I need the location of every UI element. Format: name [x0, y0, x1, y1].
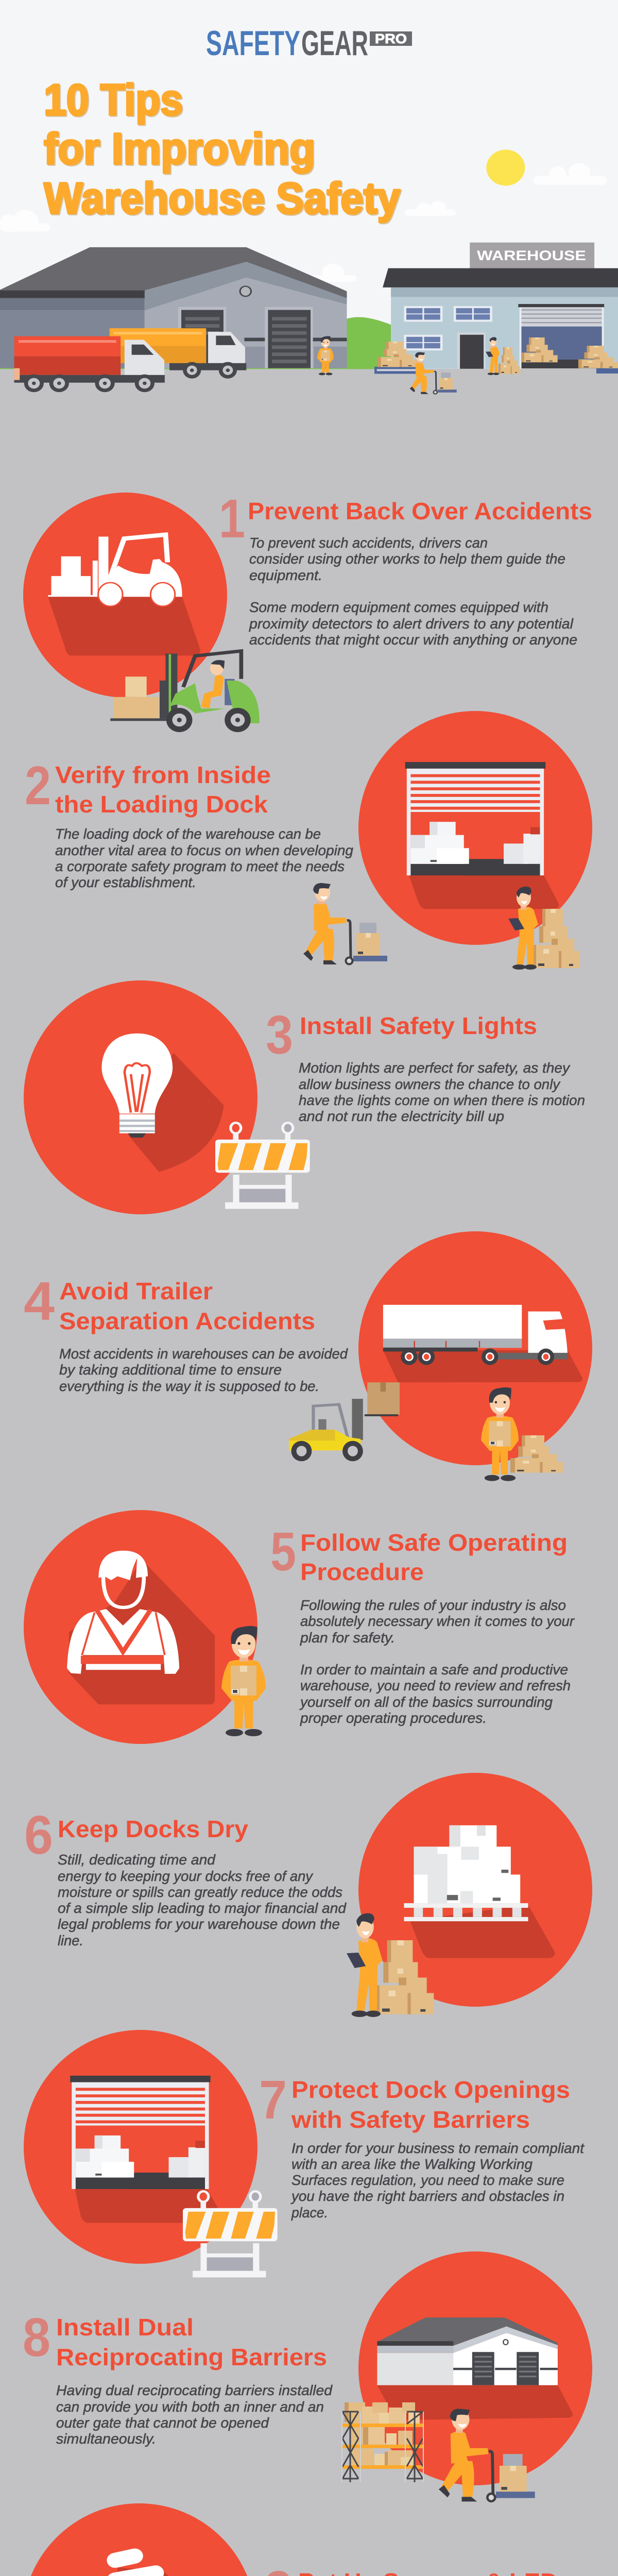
heading: Verify from Inside: [55, 761, 271, 788]
heading: Protect Dock Openings: [291, 2076, 570, 2103]
heading: Keep Docks Dry: [58, 1816, 248, 1842]
icon: worker silhouette: [67, 1551, 215, 1704]
number 6: 6: [24, 1805, 53, 1866]
heading: Separation Accidents: [59, 1308, 315, 1334]
body text: plan for safety.: [300, 1630, 395, 1646]
body text: Surfaces regulation, you need to make sure: [291, 2172, 564, 2188]
body text: Motion lights are perfect for safety, as they: [299, 1060, 571, 1076]
body text: In order for your business to remain compliant: [291, 2140, 585, 2156]
body text: Some modern equipment comes equipped with: [249, 599, 548, 615]
illustration: worker with cart: [439, 2409, 535, 2502]
body text: and not run the electricity bill up: [299, 1108, 504, 1124]
body text: with an area like the Walking Working: [291, 2156, 533, 2172]
illustration: worker with clipboard: [347, 1913, 383, 2017]
body text: of your establishment.: [55, 874, 196, 890]
number 4: 4: [24, 1271, 55, 1332]
body text: Following the rules of your industry is also: [300, 1597, 566, 1613]
number 1: 1: [219, 488, 245, 549]
heading: Reciprocating Barriers: [56, 2344, 327, 2370]
illustration: worker holding box: [221, 1626, 266, 1736]
body text: Having dual reciprocating barriers installed: [56, 2382, 333, 2398]
icon: pallet of boxes: [404, 1825, 555, 1958]
body text: moisture or spills can greatly reduce the odds: [58, 1884, 342, 1900]
body text: To prevent such accidents, drivers can: [249, 535, 488, 551]
body text: of a simple slip leading to major financial and: [58, 1900, 347, 1916]
logo: SafetyGear Pro: GEAR: [301, 24, 368, 63]
body text: proximity detectors to alert drivers to any potential: [249, 616, 574, 632]
body text: you have the right barriers and obstacles in: [290, 2188, 564, 2204]
body text: [58, 1852, 347, 1948]
body text: absolutely necessary when it comes to your: [300, 1613, 575, 1629]
illustration: worker with cart: [303, 883, 387, 964]
circle: [22, 2503, 256, 2576]
heading: [55, 761, 271, 818]
heading: [56, 2314, 327, 2370]
heading: [300, 1529, 568, 1585]
body text: everything is the way it is supposed to be.: [59, 1378, 319, 1394]
logo: SafetyGear Pro: SAFETY: [206, 24, 300, 63]
body text: [249, 535, 577, 648]
title: [44, 76, 400, 223]
circle: [358, 1773, 592, 2007]
left warehouse: [0, 247, 391, 369]
body text: proper operating procedures.: [300, 1710, 487, 1726]
icon: truck: [383, 1305, 582, 1382]
number 8: 8: [23, 2307, 50, 2368]
orange truck: [110, 328, 246, 379]
title: for Improving: [44, 125, 315, 174]
body text: legal problems for your warehouse down the: [58, 1916, 340, 1932]
panel: tip 5: [24, 1510, 575, 1744]
panel: tip 8: [23, 2251, 592, 2502]
body text: can provide you with both an inner and an: [56, 2399, 324, 2415]
panel: tip 6: [24, 1773, 592, 2017]
body text: by taking additional time to ensure: [59, 1362, 282, 1378]
heading: the Loading Dock: [55, 791, 268, 818]
warehouse sign: WAREHOUSE: [477, 248, 586, 263]
body text: allow business owners the chance to only: [299, 1076, 561, 1092]
body text: [290, 2140, 585, 2221]
body text: a corporate safety program to meet the needs: [55, 858, 345, 874]
body text: Still, dedicating time and: [58, 1852, 216, 1868]
body text: have the lights come on when there is motion: [299, 1092, 585, 1108]
illustration: boxes: [532, 909, 580, 968]
illustration: worker with clipboard: [508, 887, 538, 970]
circle: [358, 2251, 592, 2485]
number 7: 7: [259, 2070, 287, 2130]
panel: tip 9: [22, 2503, 558, 2576]
heading: Follow Safe Operating: [300, 1529, 568, 1556]
body text: energy to keeping your docks free of any: [58, 1868, 314, 1884]
circle: [24, 1510, 258, 1744]
body text: [55, 826, 353, 890]
heading: with Safety Barriers: [291, 2106, 530, 2133]
icon: CFL bulb: [111, 2556, 236, 2576]
illustration: boxes: [374, 1940, 434, 2014]
body text: place.: [291, 2205, 328, 2221]
circle: [358, 711, 592, 945]
heading: Avoid Trailer: [59, 1278, 213, 1304]
illustration: barrier: [183, 2191, 278, 2277]
title: 10 Tips: [44, 76, 183, 125]
illustration: warehouses and trucks: [0, 149, 618, 394]
heading: [59, 1278, 315, 1334]
body text: accidents that might occur with anything or anyone: [249, 632, 577, 648]
circle: [24, 980, 258, 1214]
heading: Procedure: [300, 1558, 424, 1585]
panel: tip 7: [24, 2030, 585, 2277]
body text: [299, 1060, 585, 1124]
circle: [23, 493, 227, 698]
illustration: green forklift: [110, 651, 260, 732]
boxes and workers: [317, 336, 618, 394]
body text: equipment.: [249, 567, 322, 583]
number 5: 5: [270, 1521, 296, 1582]
heading: [291, 2076, 570, 2133]
icon: roller door: [70, 2076, 227, 2223]
logo: SafetyGear Pro: [206, 24, 412, 63]
heading: Install Dual: [56, 2314, 194, 2341]
body text: [299, 1597, 575, 1726]
icon: white forklift: [48, 535, 200, 655]
red truck: [14, 336, 165, 392]
icon: roller door: [405, 762, 559, 909]
icon: warehouse: [377, 2317, 573, 2420]
panel: tip 1: [23, 488, 592, 732]
body text: Most accidents in warehouses can be avoided: [59, 1346, 348, 1362]
body text: [59, 1346, 348, 1394]
body text: outer gate that cannot be opened: [56, 2415, 269, 2431]
panel: tip 3: [24, 980, 585, 1214]
illustration: shelves: [341, 2402, 424, 2482]
body text: simultaneously.: [56, 2431, 156, 2447]
title: Warehouse Safety: [44, 174, 400, 223]
icon: light bulb: [101, 1033, 224, 1172]
body text: yourself on all of the basics surrounding: [299, 1694, 553, 1710]
body text: warehouse, you need to review and refresh: [300, 1677, 571, 1693]
circle: [358, 1231, 592, 1465]
illustration: boxes: [510, 1435, 563, 1472]
right warehouse: [374, 243, 618, 374]
body text: In order to maintain a safe and productive: [300, 1662, 568, 1677]
body text: another vital area to focus on when developing: [55, 842, 353, 858]
body text: line.: [58, 1933, 83, 1948]
illustration: yellow forklift: [289, 1382, 400, 1461]
body text: [56, 2382, 333, 2447]
body text: consider using other works to help them guide the: [249, 551, 565, 567]
panel: tip 4: [24, 1231, 592, 1481]
number 2: 2: [25, 755, 51, 816]
heading: Prevent Back Over Accidents: [248, 498, 592, 524]
logo: SafetyGear Pro: PRO: [375, 31, 407, 46]
circle: [24, 2030, 258, 2264]
illustration: worker holding box: [481, 1387, 519, 1481]
sun and clouds: [0, 149, 607, 282]
number 3: 3: [266, 1005, 293, 1065]
illustration: barrier: [215, 1123, 310, 1209]
panel: tip 2: [25, 711, 592, 970]
heading: Install Safety Lights: [300, 1012, 537, 1039]
body text: The loading dock of the warehouse can be: [55, 826, 321, 842]
